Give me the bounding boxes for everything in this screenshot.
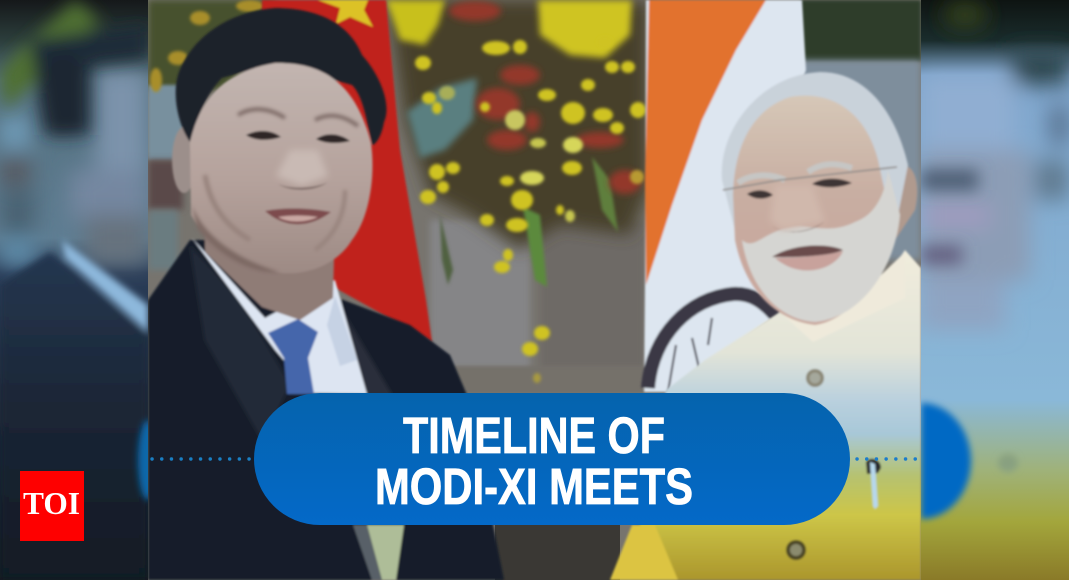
tie (268, 319, 318, 394)
ear (171, 126, 192, 194)
TOI logo: TOI (23, 485, 80, 521)
central photo (148, 0, 921, 580)
saffron band (645, 0, 766, 285)
Ashoka chakra (648, 294, 776, 392)
flower arrangement (150, 0, 648, 383)
TOI logo (20, 471, 84, 541)
white hair (722, 72, 908, 230)
dotted timeline line left (152, 457, 254, 461)
buttons (806, 369, 824, 387)
left blurred side panel (0, 0, 158, 580)
collar (796, 256, 901, 340)
title pill: MODI-XI MEETS (375, 458, 693, 515)
ear (895, 166, 917, 240)
photo background wall (148, 0, 921, 580)
title text: TIMELINE OF (403, 407, 665, 464)
brows (738, 164, 852, 183)
face (733, 96, 893, 325)
eyes (747, 179, 852, 199)
Modi figure (610, 72, 921, 580)
mouth (265, 208, 331, 224)
nose (772, 190, 821, 232)
eyes and brows (246, 131, 350, 143)
beard (742, 170, 900, 322)
neck (203, 238, 336, 322)
face (190, 63, 372, 273)
flag star (318, 0, 373, 27)
right blurred side panel (921, 0, 1069, 580)
nose (276, 150, 328, 186)
Xi figure (148, 8, 504, 580)
Indian flag (644, 0, 806, 392)
hair (176, 8, 387, 145)
pen (866, 459, 881, 474)
mouth (772, 246, 843, 257)
spectacles (723, 167, 897, 190)
Chinese flag (262, 0, 432, 342)
dotted timeline line right (857, 457, 918, 461)
kurta (610, 250, 921, 580)
shirt (192, 238, 367, 394)
suit (148, 240, 504, 580)
title pill (254, 393, 850, 525)
